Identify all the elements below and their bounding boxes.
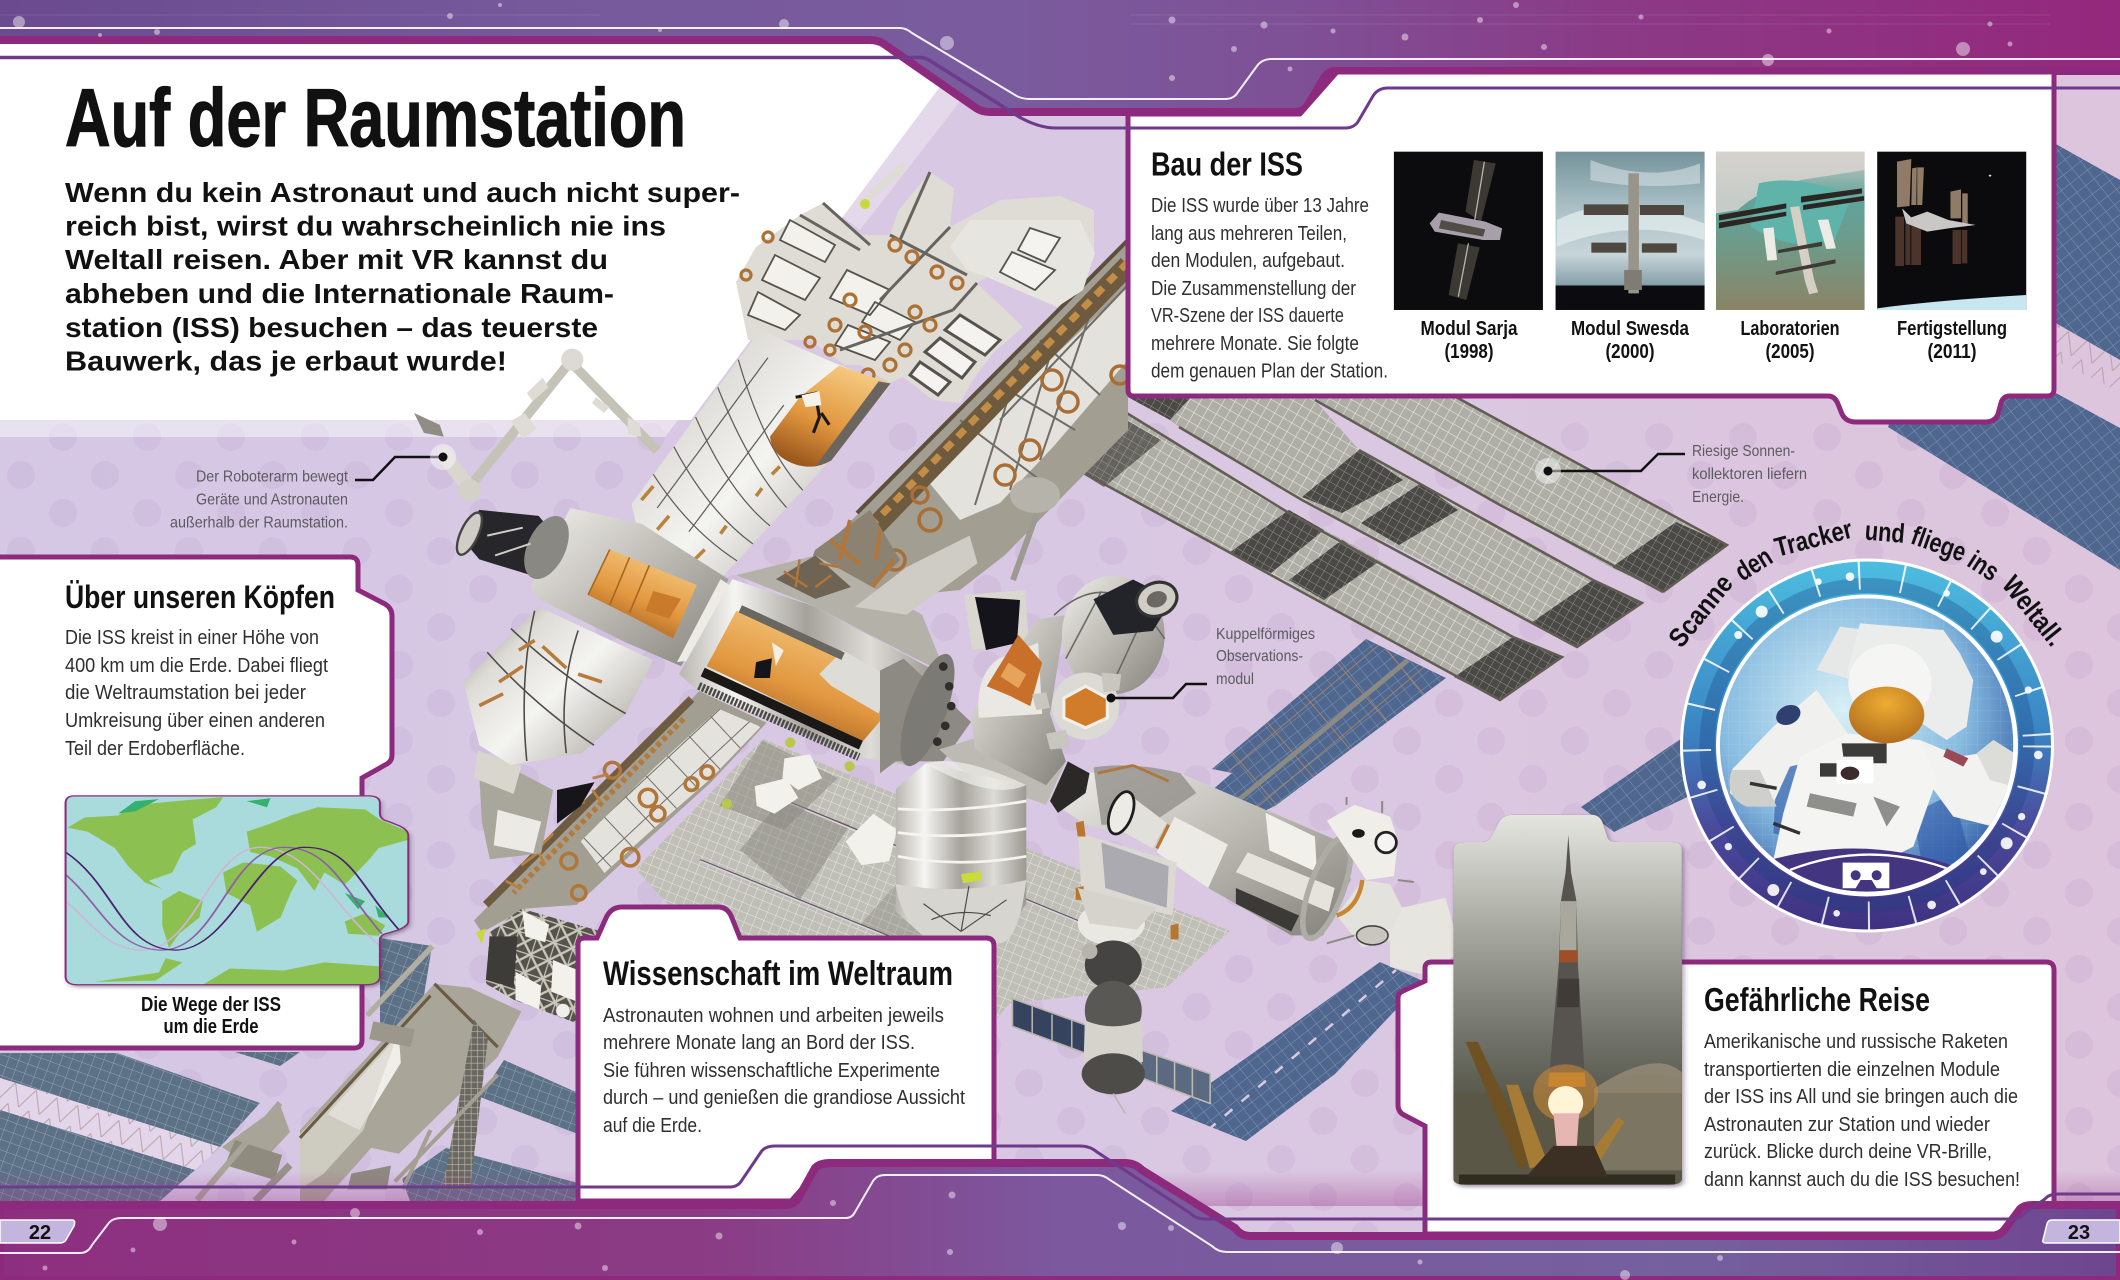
- curved tracker text: und: [1864, 516, 1906, 549]
- photo captions: Laboratorien: [1740, 318, 1840, 340]
- heading: Gefährliche Reise: Gefährliche Reise: [1704, 981, 1930, 1018]
- text: Über unseren Köpfen body: [65, 627, 328, 760]
- text: Bau der ISS body: mehrere Monate. Sie folgte: [1151, 333, 1359, 355]
- text: Gefährliche Reise body: zurück. Blicke durch deine VR-Brille,: [1704, 1141, 1992, 1163]
- ISS: robot arm: [414, 349, 657, 501]
- top header band: [0, 0, 2120, 112]
- photo captions: Fertigstellung: [1897, 318, 2007, 340]
- text: Wissenschaft body: mehrere Monate lang an Bord der ISS.: [603, 1032, 915, 1054]
- text: Gefährliche Reise body: dann kannst auch du die ISS besuchen!: [1704, 1169, 2020, 1191]
- text: intro paragraph: station (ISS) besuchen – das teuerste: [65, 312, 598, 343]
- text: Bau der ISS body: VR-Szene der ISS dauerte: [1151, 305, 1344, 327]
- text: Wissenschaft body: durch – und genießen die grandiose Aussicht: [603, 1087, 965, 1109]
- callout: solar collectors label: kollektoren liefern: [1692, 466, 1807, 483]
- callout: observation module label: modul: [1216, 671, 1254, 688]
- photo: Modul Swesda: [1556, 152, 1705, 310]
- title: Auf der Raumstation: [65, 73, 686, 164]
- photo captions: (2000): [1606, 341, 1654, 363]
- text: Über unseren Köpfen body: die Weltraumstation bei jeder: [65, 682, 306, 704]
- text: Bau der ISS body: Die Zusammenstellung der: [1151, 278, 1356, 300]
- callout: observation module label: [1106, 626, 1315, 702]
- curved tracker text: Scanne: [1663, 569, 1739, 653]
- ISS: lower-left module at bottom: [197, 1103, 290, 1201]
- text: Wissenschaft body: [603, 1005, 965, 1137]
- bottom footer band: [0, 1146, 2120, 1280]
- text: intro paragraph: abheben und die Internationale Raum-: [65, 278, 614, 309]
- page number: 22: 22: [29, 1222, 51, 1244]
- curved tracker text: ins: [1962, 545, 2005, 587]
- photo captions: [1420, 318, 2007, 363]
- panel: Gefährliche Reise: [1398, 962, 2054, 1234]
- curved tracker text: [1663, 514, 2070, 653]
- heading: Über unseren Köpfen: Über unseren Köpfen: [65, 579, 335, 615]
- text: Gefährliche Reise body: Astronauten zur Station und wieder: [1704, 1114, 1990, 1136]
- text: Wissenschaft body: Sie führen wissenschaftliche Experimente: [603, 1060, 940, 1082]
- callout: solar collectors label: Riesige Sonnen-: [1692, 443, 1795, 460]
- text: Bau der ISS body: lang aus mehreren Teilen,: [1151, 223, 1347, 245]
- callout: solar collectors label: Energie.: [1692, 489, 1744, 506]
- solar arrays: grey panels: [636, 390, 1727, 1022]
- text: Bau der ISS body: [1151, 195, 1388, 382]
- map caption: um die Erde: [164, 1016, 258, 1038]
- callout: robot arm label: Geräte und Astronauten: [196, 492, 348, 508]
- callout: observation module label: Kuppelförmiges: [1216, 626, 1315, 643]
- text: intro paragraph: reich bist, wirst du wahrscheinlich nie ins: [65, 210, 666, 242]
- text: Wissenschaft body: auf die Erde.: [603, 1115, 702, 1137]
- curved tracker text: Tracker: [1771, 514, 1856, 563]
- text: Bau der ISS body: den Modulen, aufgebaut.: [1151, 250, 1345, 272]
- panel: white intro background: [0, 44, 945, 437]
- ISS: lower truss and lattice: [300, 691, 897, 1201]
- text: Gefährliche Reise body: der ISS ins All und sie bringen auch die: [1704, 1086, 2018, 1108]
- photo: rocket launch: [1452, 813, 1685, 1187]
- photo captions: (2011): [1928, 341, 1976, 363]
- curved tracker text: den: [1730, 541, 1778, 587]
- text: Bau der ISS body: dem genauen Plan der Station.: [1151, 360, 1388, 382]
- text: Über unseren Köpfen body: Teil der Erdoberfläche.: [65, 738, 245, 760]
- bottom fade above band: [0, 1170, 2120, 1206]
- text: intro paragraph: Weltall reisen. Aber mit VR kannst du: [65, 244, 608, 275]
- photo: Laboratorien: [1716, 152, 1865, 310]
- photo captions: (1998): [1444, 341, 1494, 363]
- map: ISS orbit paths: [64, 795, 410, 987]
- callout: robot arm label: Der Roboterarm bewegt: [196, 468, 348, 486]
- panel: Bau der ISS: [0, 58, 2120, 422]
- ISS: upper tube module with gold cutaway: [632, 330, 891, 579]
- map caption: [141, 994, 281, 1038]
- text: Gefährliche Reise body: Amerikanische und russische Raketen: [1704, 1031, 2008, 1053]
- panel: Über unseren Köpfen: [0, 557, 410, 1048]
- photo: Fertigstellung: [1877, 152, 2026, 310]
- ISS: thermal blocks at top: [736, 165, 1095, 403]
- text: Über unseren Köpfen body: Die ISS kreist in einer Höhe von: [65, 627, 319, 649]
- ISS: service module and Soyuz: [1012, 761, 1461, 1113]
- icon set: ring tile symbols: [1697, 572, 2043, 917]
- text: Gefährliche Reise body: transportierten die einzelnen Module: [1704, 1059, 2000, 1081]
- ISS: right node, cupola, orange bay and canister: [880, 576, 1182, 943]
- photo captions: (2005): [1766, 341, 1814, 363]
- text: intro paragraph: [65, 177, 740, 376]
- photo captions: Modul Swesda: [1571, 318, 1690, 340]
- curved tracker text: Weltall.: [1996, 570, 2070, 652]
- text: intro paragraph: Bauwerk, das je erbaut wurde!: [65, 346, 507, 376]
- text: Über unseren Köpfen body: Umkreisung über einen anderen: [65, 710, 325, 732]
- ISS: central modules with orange interiors: [452, 508, 978, 765]
- text: Bau der ISS body: Die ISS wurde über 13 Jahre: [1151, 195, 1369, 217]
- text: intro paragraph: Wenn du kein Astronaut und auch nicht super-: [65, 177, 740, 208]
- ISS: upper truss: [800, 238, 1129, 650]
- photo: Modul Sarja: [1394, 152, 1543, 310]
- icon: VR headset: [1843, 863, 1889, 888]
- text: Wissenschaft body: Astronauten wohnen und arbeiten jeweils: [603, 1005, 944, 1027]
- heading: Wissenschaft im Weltraum: Wissenschaft im Weltraum: [603, 955, 953, 993]
- page number: 23: 23: [2068, 1222, 2090, 1244]
- callout: robot arm label: [170, 444, 456, 532]
- panel: Wissenschaft im Weltraum: [578, 907, 994, 1201]
- page number: 22: [0, 1220, 75, 1244]
- page number: 23: [2043, 1220, 2120, 1244]
- heading: Bau der ISS: Bau der ISS: [1151, 146, 1303, 182]
- callout: observation module label: Observations-: [1216, 648, 1303, 665]
- text: Über unseren Köpfen body: 400 km um die Erde. Dabei fliegt: [65, 655, 328, 677]
- callout: robot arm label: außerhalb der Raumstation.: [170, 514, 348, 532]
- callout: solar collectors label: [1535, 443, 1807, 506]
- curved tracker text: fliege: [1907, 520, 1970, 567]
- badge: VR tracker: [1663, 514, 2070, 932]
- photo captions: Modul Sarja: [1420, 318, 1518, 340]
- text: Gefährliche Reise body: [1704, 1031, 2020, 1191]
- map caption: Die Wege der ISS: [141, 994, 281, 1016]
